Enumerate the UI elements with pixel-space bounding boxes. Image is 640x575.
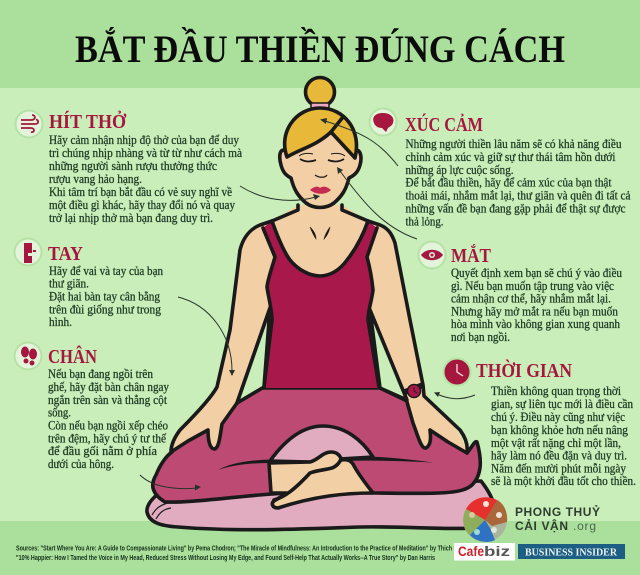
text block: những vấn đề bạn đang gặp phải để thật sự được <box>406 202 626 216</box>
icon: wind <box>16 110 42 138</box>
sources: Sources: "Start Where You Are: A Guide to Compassionate Living" by Pema Chodron; "The Miracle of Mindfulness: An Introduction to the Practice of Meditation" by Thich <box>16 544 452 552</box>
arms and shoulders skin <box>171 205 467 453</box>
heading: XÚC CẢM <box>405 112 483 136</box>
logo: Cafebiz: Cafe <box>458 543 484 559</box>
text block: chú ý. Điều này cũng như việc <box>491 410 626 424</box>
icon: eye <box>418 242 446 268</box>
face features <box>299 153 345 194</box>
text block: trên đệm, hãy chú ý tư thế <box>48 432 167 446</box>
text block: nơi bạn ngồi. <box>451 330 510 344</box>
heading: MẮT <box>451 243 492 267</box>
panel: time <box>444 358 636 488</box>
text block: dưới của hông. <box>48 457 114 471</box>
cushion <box>147 481 495 530</box>
text block: trở lại nhịp thở mà bạn đang duy trì. <box>49 211 213 225</box>
text block: gì. Nếu bạn muốn tập trung vào việc <box>451 279 615 293</box>
arrow: breathing <box>240 186 320 200</box>
heading: THỜI GIAN <box>476 358 572 382</box>
logo mark <box>463 497 507 542</box>
text block: hòa mình vào không gian xung quanh <box>451 317 620 331</box>
icon: brain <box>370 108 396 136</box>
title: BẮT ĐẦU THIỀN ĐÚNG CÁCH <box>75 26 565 71</box>
text block <box>48 367 170 471</box>
text block: một vật rất nặng chỉ một lần, <box>491 436 621 450</box>
arm outlines <box>171 205 467 453</box>
icon: clock <box>444 358 470 386</box>
text block: trên đùi giống như trong <box>49 302 161 316</box>
logo: Business Insider <box>518 544 625 559</box>
text block: thả lỏng. <box>406 214 444 228</box>
text block: ghế, hãy đặt bàn chân ngay <box>48 380 170 394</box>
panel: hands <box>14 238 163 329</box>
arrow: feet <box>140 475 201 490</box>
green gaps between arms and torso <box>237 308 407 403</box>
figure: meditating woman <box>147 78 495 530</box>
text block: trì chúng nhịp nhàng và từ từ như cách mà <box>49 146 243 160</box>
text block <box>49 264 163 329</box>
top band <box>0 0 640 88</box>
text block: Hãy để vai và tay của bạn <box>49 264 163 278</box>
text block <box>451 266 622 344</box>
bottom band <box>0 521 640 575</box>
text block: Đặt hai bàn tay cân bằng <box>49 290 160 304</box>
text block: sống. <box>48 406 71 420</box>
pants <box>153 388 480 502</box>
text block <box>49 133 243 225</box>
text block: Hãy cảm nhận nhịp độ thở của bạn để duy <box>49 133 240 147</box>
text block: Khi tâm trí bạn bắt đầu có vẻ suy nghĩ về <box>49 185 232 199</box>
text block: hãy làm nó đều đặn và duy trì. <box>491 448 627 462</box>
legs and feet <box>218 452 433 508</box>
logo wordmark: PHONG THUỶ <box>515 504 600 519</box>
text block: Nếu bạn đang ngồi trên <box>48 367 153 381</box>
heading: HÍT THỞ <box>49 110 126 133</box>
text block: thư giãn. <box>49 276 89 290</box>
text block: Để bắt đầu thiền, hãy để cảm xúc của bạn thật <box>406 176 612 190</box>
text block: cảm nhận cơ thể, hãy nhắm mắt lại. <box>451 292 611 306</box>
arrow: emotion <box>320 118 398 166</box>
logo: Phong Thuy Cai Van: .org <box>573 519 596 533</box>
logo: Cafebiz <box>454 543 515 560</box>
torso tank top <box>262 209 380 388</box>
sources <box>16 544 452 562</box>
text block: một điều gì khác, hãy thay đổi nó và quay <box>49 198 236 212</box>
text block: để đầu gối nằm ở phía <box>48 444 158 458</box>
text block: Những người thiền lâu năm sẽ có khả năng điều <box>406 137 622 151</box>
text block <box>491 384 636 488</box>
text block: Còn nếu bạn ngồi xếp chéo <box>48 418 168 432</box>
text block: những áp lực cuộc sống. <box>406 163 514 177</box>
heading: CHÂN <box>48 344 97 368</box>
sources: "10% Happier: How I Tamed the Voice in My Head, Reduced Stress Without Losing My Edge, and Found Self-Help That Actually Works--A True Story" by Dan Harris <box>16 553 435 562</box>
text block: Năm đến mười phút mỗi ngày <box>491 462 627 476</box>
text block: hình. <box>49 315 72 329</box>
text block: Thiền không quan trọng thời <box>491 384 622 398</box>
logo: Phong Thuy Cai Van: CẢI VẬN <box>515 518 568 533</box>
text block: những người sành rượu thưởng thức <box>49 159 218 173</box>
arrow: hands <box>178 297 235 376</box>
heading: TAY <box>48 243 84 265</box>
text block: ngắn trên sàn và thẳng cột <box>48 393 168 407</box>
panel: eyes <box>418 242 622 344</box>
text block: Quyết định xem bạn sẽ chú ý vào điều <box>451 266 622 280</box>
text block: rượu vang hảo hạng. <box>49 172 142 186</box>
arrow: eyes <box>337 167 417 239</box>
logo: Business Insider: BUSINESS INSIDER <box>525 548 617 558</box>
panel: emotion <box>370 108 631 228</box>
inner cushion arch <box>270 426 373 462</box>
head <box>280 108 361 208</box>
icon: footprints <box>14 342 42 370</box>
logo: Phong Thuy Cai Van <box>463 497 600 542</box>
watch <box>405 384 423 398</box>
panel: feet <box>14 342 170 471</box>
icon: hand <box>14 238 42 266</box>
text block: Nhưng hãy mở mắt ra nếu bạn muốn <box>451 304 618 318</box>
arrow: time <box>434 392 475 399</box>
hair bun <box>306 78 334 108</box>
text block <box>406 137 631 228</box>
panel: breathing <box>16 110 243 225</box>
text block: chỉnh cảm xúc và giữ sự thư thái tâm hồn dưới <box>406 150 616 164</box>
logo: Cafebiz: biz <box>484 543 510 559</box>
text block: bạn không khỏe hơn nếu nâng <box>491 423 628 437</box>
